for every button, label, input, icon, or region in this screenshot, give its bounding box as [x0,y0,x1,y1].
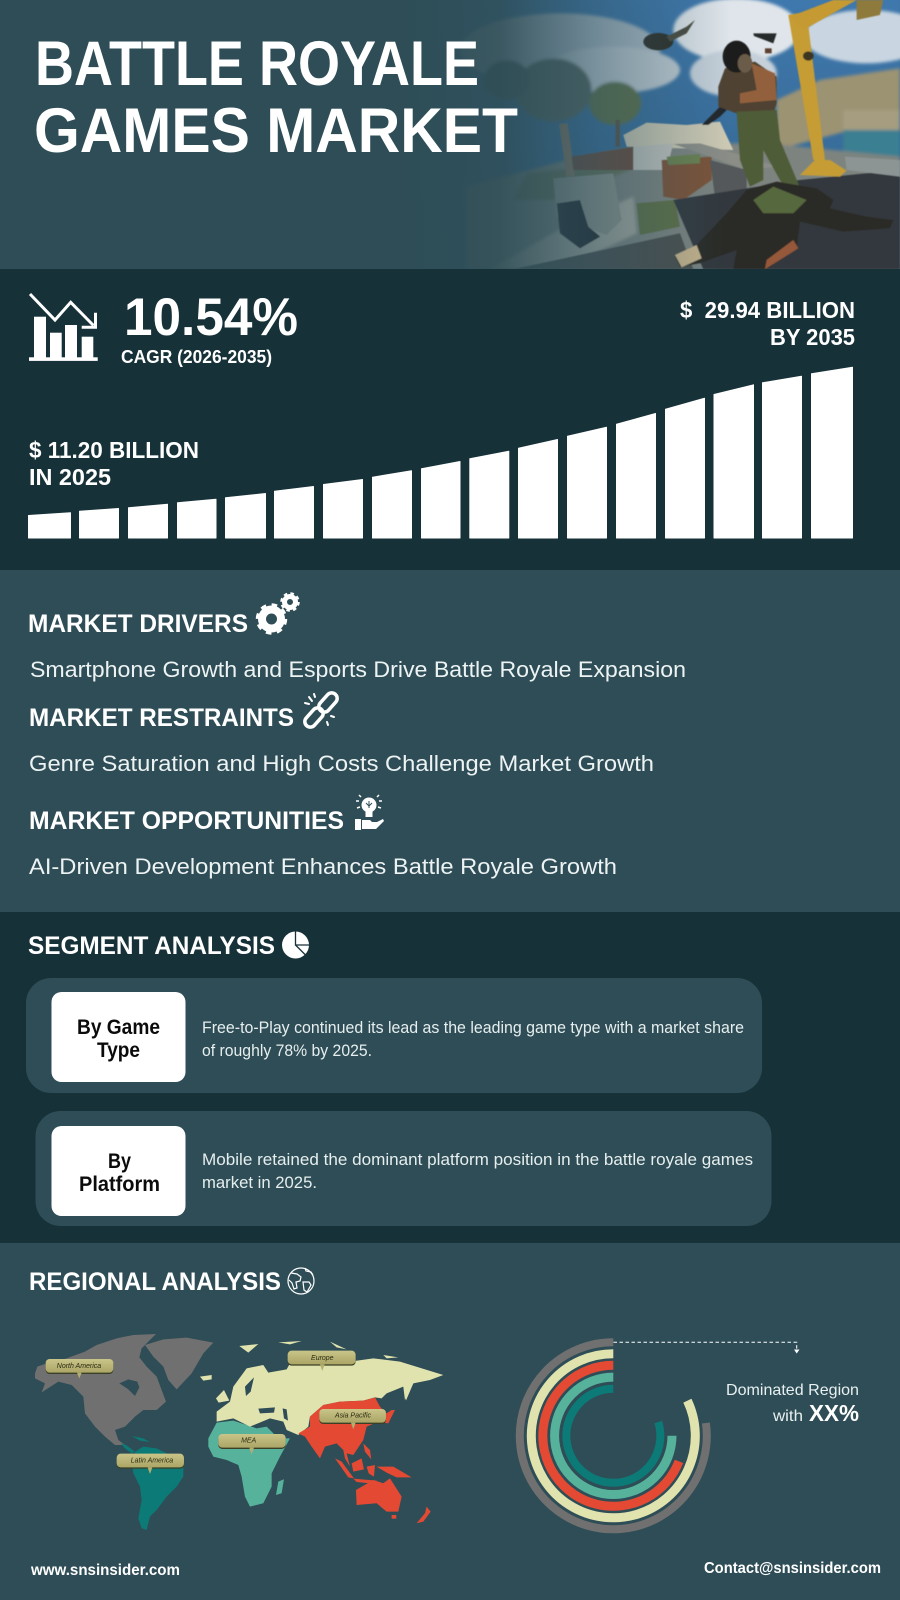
bar chart: market growth [28,367,852,538]
icon: bar chart with arrow [29,294,98,361]
footer: website: www.snsinsider.com [30,1562,180,1579]
callout: Asia Pacific: Asia Pacific [334,1413,372,1420]
icon: gears [258,594,298,633]
heading: market opportunities: MARKET OPPORTUNITIES [29,807,344,835]
CAGR value: 10.54% [124,288,298,347]
heading: market drivers: MARKET DRIVERS [28,610,248,638]
card: by game type: Type [97,1039,140,1062]
panel: header [0,0,900,270]
card: by platform [36,1111,772,1226]
start value label: $ 11.20 BILLION [29,437,199,463]
panel: regional analysis [0,1243,900,1600]
callout: Europe [288,1351,356,1371]
start value label [29,437,199,490]
heading: market restraints: MARKET RESTRAINTS [29,704,294,732]
callout: dominated region [726,1382,859,1426]
text: restraints summary: Genre Saturation and High Costs Challenge Market Growth [29,751,654,776]
end value label: BY 2035 [770,324,855,350]
end value label [680,297,855,350]
text: drivers summary: Smartphone Growth and Esports Drive Battle Royale Expansion [30,657,686,682]
dashed leader arrow [614,1342,800,1354]
heading: regional analysis: REGIONAL ANALYSIS [29,1268,281,1296]
end value label: $ 29.94 BILLION [680,297,855,323]
footer: contact email: Contact@snsinsider.com [704,1560,881,1577]
card: by game type [26,978,762,1093]
card: by platform: By [108,1150,131,1173]
region: Europe [200,1341,443,1435]
region: North America [35,1334,213,1445]
icon: light bulb in hand [355,795,384,830]
card: by platform: Platform [79,1173,160,1196]
callout: MEA [218,1434,286,1454]
icon: broken chain link [303,691,339,729]
callout: North America: North America [57,1363,101,1370]
callout: Europe: Europe [311,1355,334,1362]
region: Asia Pacific [298,1397,431,1523]
title [34,29,518,166]
panel: drivers, restraints, opportunities [0,570,900,912]
callout: MEA: MEA [241,1438,257,1445]
icon: globe [288,1268,314,1294]
text: opportunities summary: AI-Driven Development Enhances Battle Royale Growth [29,854,617,879]
panel: market size and CAGR [0,269,900,570]
region: Middle East and Africa [208,1421,290,1507]
callout: Asia Pacific [319,1409,386,1429]
card: by game type: of roughly 78% by 2025. [202,1041,372,1060]
radial bar chart [520,1342,707,1529]
card: by game type: Free-to-Play continued its lead as the leading game type with a market share [202,1018,744,1037]
card: by game type: By Game [77,1016,160,1039]
callout: dominated region: XX% [809,1400,859,1426]
icon: pie chart [282,931,310,958]
callout: North America [46,1359,113,1378]
callout: Latin America: Latin America [131,1458,173,1465]
region: Latin America [121,1436,183,1530]
hero photo: battle scene [464,0,900,269]
panel: segment analysis [0,912,900,1243]
title: GAMES MARKET [34,96,518,166]
card: by platform: market in 2025. [202,1173,317,1192]
callout: dominated region: with [772,1408,803,1425]
world map [35,1334,443,1530]
heading: segment analysis: SEGMENT ANALYSIS [28,932,275,960]
start value label: IN 2025 [29,464,111,490]
callout: Latin America [117,1454,184,1474]
callout: dominated region: Dominated Region [726,1382,859,1399]
card: by platform: Mobile retained the dominant platform position in the battle royale games [202,1150,753,1169]
CAGR label: CAGR (2026-2035) [121,347,272,367]
title: BATTLE ROYALE [35,29,479,99]
